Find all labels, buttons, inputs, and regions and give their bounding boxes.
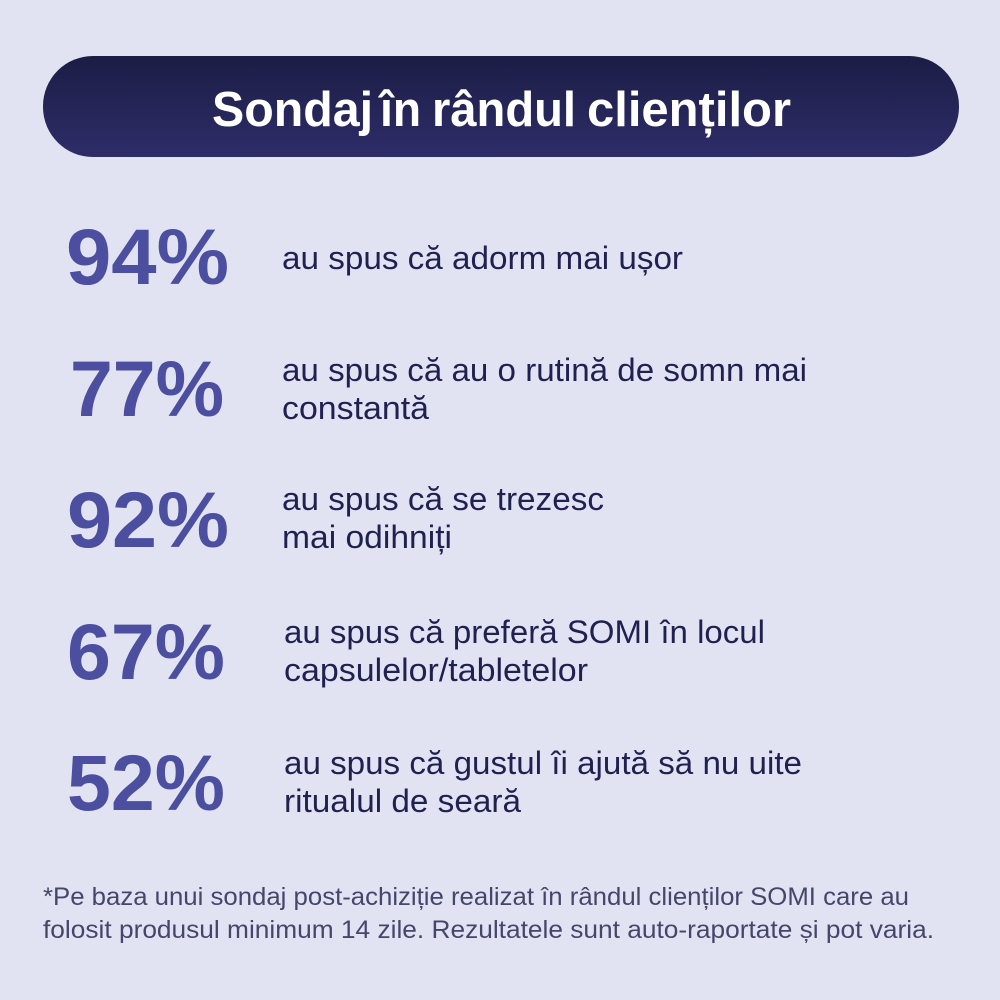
stat: 67%: 67% xyxy=(67,607,225,696)
description: 67% xyxy=(284,614,765,688)
stat: 52%: 52% xyxy=(67,738,225,827)
description: 92% xyxy=(282,481,604,555)
title: în xyxy=(378,83,421,137)
description: 77% xyxy=(282,352,807,426)
survey row: 77% xyxy=(70,344,807,433)
title: Sondaj xyxy=(212,83,373,137)
description: 52%: ritualul de seară xyxy=(284,783,521,819)
title: rândul xyxy=(432,83,576,137)
description: 77%: au spus că au o rutină de somn mai xyxy=(282,352,807,388)
title xyxy=(212,83,791,137)
description: 77%: constantă xyxy=(282,390,429,426)
description: 52%: au spus că gustul îi ajută să nu uite xyxy=(284,745,802,781)
survey row: 92% xyxy=(67,475,604,564)
header banner xyxy=(43,56,959,157)
survey row: 52% xyxy=(67,738,802,827)
title: clienților xyxy=(587,83,791,137)
description: 52% xyxy=(284,745,802,819)
footnote xyxy=(43,883,934,944)
stat: 77%: 77% xyxy=(70,344,224,433)
footnote: *Pe baza unui sondaj post-achiziție realizat în rândul clienților SOMI care au xyxy=(43,883,909,911)
footnote: folosit produsul minimum 14 zile. Rezultatele sunt auto-raportate și pot varia. xyxy=(43,916,934,944)
description: 92%: au spus că se trezesc xyxy=(282,481,604,517)
survey row: 67% xyxy=(67,607,765,696)
survey row: 94% xyxy=(66,212,683,301)
description: 67%: au spus că preferă SOMI în locul xyxy=(284,614,765,650)
stat: 92%: 92% xyxy=(67,475,229,564)
description: 94%: au spus că adorm mai ușor xyxy=(282,240,683,276)
description: 67%: capsulelor/tabletelor xyxy=(284,652,588,688)
description: 92%: mai odihniți xyxy=(282,519,452,555)
stat: 94%: 94% xyxy=(66,212,229,301)
